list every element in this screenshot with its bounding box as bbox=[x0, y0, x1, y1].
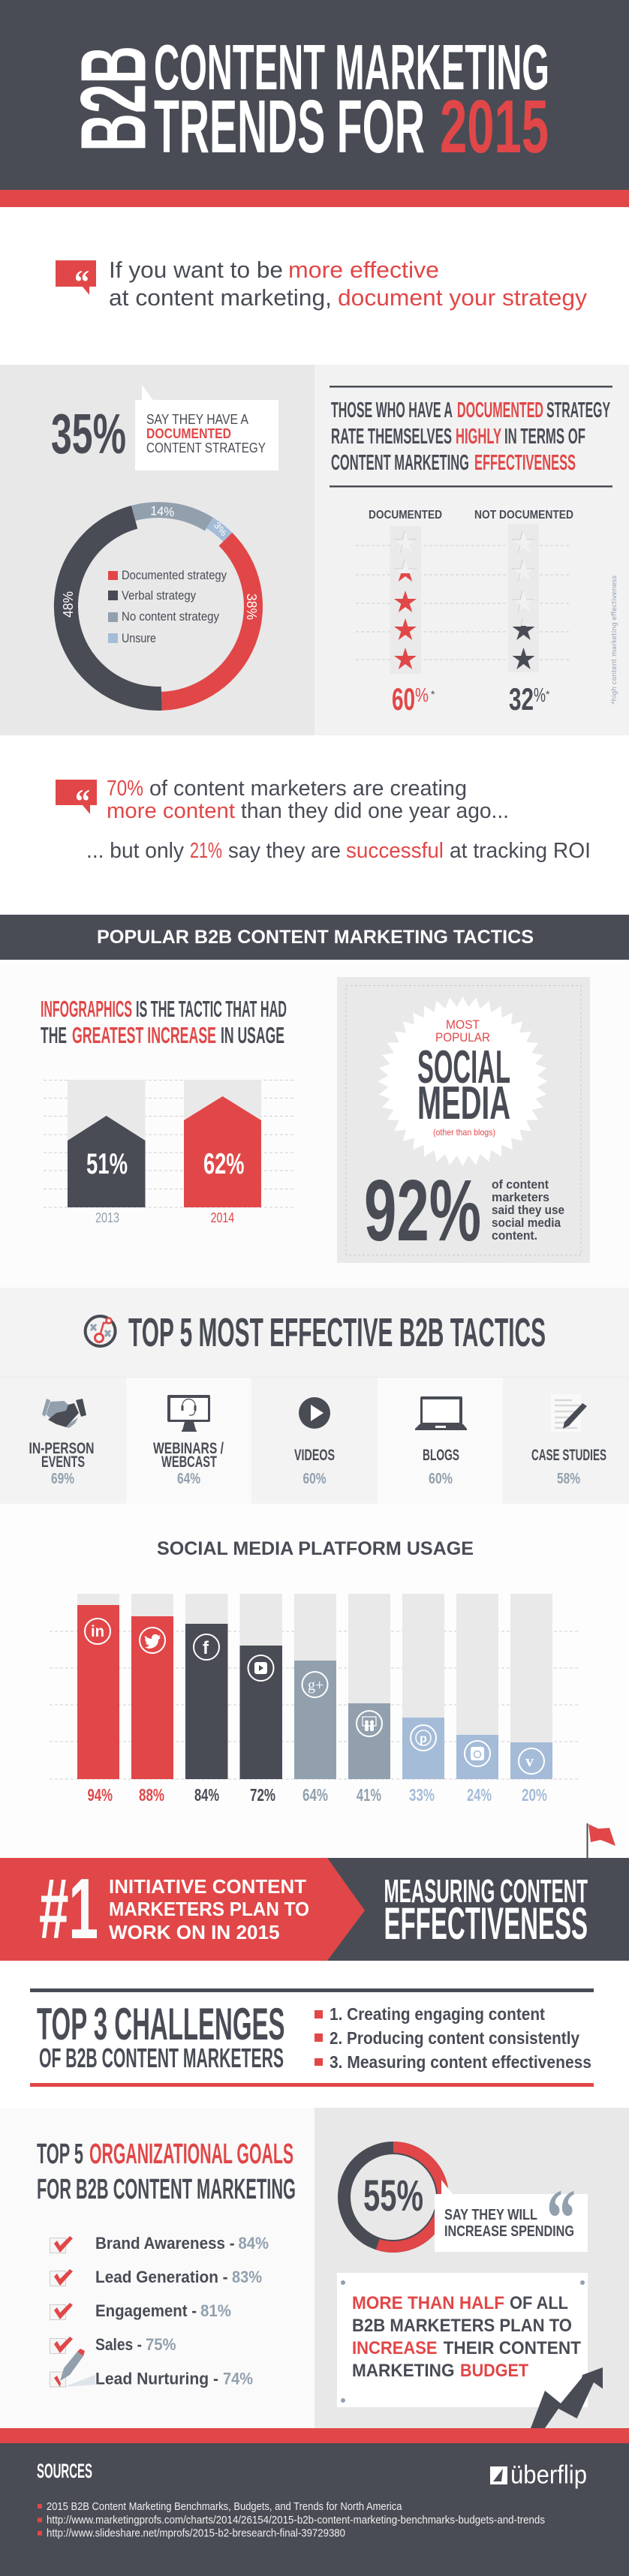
goal: engagement: 81% bbox=[200, 2301, 231, 2320]
icon: flag bbox=[587, 1823, 615, 1858]
bar: youtube bbox=[240, 1594, 282, 1805]
quote: more content: 21% bbox=[190, 839, 222, 863]
bar: linkedin: 94% bbox=[87, 1785, 113, 1805]
stat: 32 percent: 32 bbox=[509, 681, 534, 717]
goal: brand awareness bbox=[50, 2234, 269, 2253]
goal: lead generation: 83% bbox=[232, 2268, 262, 2286]
stat description: marketers bbox=[492, 1190, 549, 1204]
note card: budget: THEIR CONTENT bbox=[444, 2338, 581, 2358]
note card: budget: BUDGET bbox=[460, 2361, 528, 2381]
stat: 60 percent: 60 bbox=[392, 681, 415, 717]
panel: organizational goals bbox=[0, 2108, 314, 2428]
bar: twitter: 88% bbox=[139, 1785, 164, 1805]
callout: documented content strategy: DOCUMENTED bbox=[146, 425, 231, 441]
tactic: webinars: WEBINARS / bbox=[153, 1440, 224, 1457]
stat description: content. bbox=[492, 1228, 537, 1243]
star ratings chart: DOCUMENTED bbox=[369, 509, 442, 522]
icon: handshake bbox=[42, 1399, 86, 1428]
quote: document your strategy: at content marketing, bbox=[109, 284, 332, 311]
heading: TOP 3 CHALLENGES bbox=[37, 1999, 284, 2049]
donut chart: 55 percent: 55% bbox=[363, 2172, 423, 2220]
challenges list: 1. Creating engaging content bbox=[330, 2004, 545, 2024]
donut chart bbox=[54, 502, 263, 711]
heading: infographics: THE bbox=[41, 1022, 67, 1048]
tactic: blogs bbox=[378, 1378, 503, 1504]
title bbox=[63, 32, 549, 169]
panel: spending bbox=[314, 2108, 629, 2428]
panel: social media most popular bbox=[337, 977, 590, 1263]
bar: instagram: 24% bbox=[467, 1785, 492, 1805]
title: 2015 bbox=[440, 85, 549, 169]
header banner bbox=[0, 0, 629, 207]
tactic: videos: VIDEOS bbox=[294, 1447, 335, 1464]
goal: sales bbox=[50, 2335, 176, 2354]
icon: speech bubble bbox=[56, 260, 96, 301]
goal: lead generation bbox=[50, 2268, 262, 2286]
bar: slideshare: 41% bbox=[357, 1785, 381, 1805]
goal: brand awareness: 84% bbox=[239, 2234, 269, 2253]
quote: document your strategy bbox=[56, 257, 587, 311]
section banner: popular tactics bbox=[0, 915, 629, 960]
tactic: webinars: WEBCAST bbox=[161, 1453, 217, 1471]
icon: document and pencil bbox=[551, 1394, 587, 1432]
tactic: webinars bbox=[126, 1378, 251, 1504]
stat description: of content bbox=[492, 1177, 549, 1192]
panel: top 3 challenges bbox=[30, 1988, 594, 2087]
donut chart: 48% bbox=[61, 591, 76, 618]
heading bbox=[331, 398, 610, 475]
challenges list bbox=[314, 2004, 591, 2072]
goal: brand awareness: Brand Awareness - bbox=[95, 2234, 235, 2253]
bar: vimeo bbox=[510, 1594, 552, 1805]
quote: document your strategy: document your strategy bbox=[338, 284, 587, 311]
heading: FOR B2B CONTENT MARKETING bbox=[37, 2174, 296, 2205]
bar: facebook bbox=[185, 1594, 228, 1805]
goal: lead nurturing: Lead Nurturing - bbox=[95, 2370, 218, 2388]
goal: lead generation: Lead Generation - bbox=[95, 2268, 228, 2286]
sources list bbox=[38, 2500, 545, 2539]
footnote: *high content marketing effectiveness bbox=[611, 575, 618, 705]
goal: sales: 75% bbox=[146, 2335, 176, 2354]
bar: pinterest bbox=[402, 1594, 444, 1805]
donut chart: 14% bbox=[150, 503, 175, 519]
icon: playbook bbox=[86, 1316, 116, 1346]
label: number one: #1 bbox=[39, 1862, 98, 1957]
measuring effectiveness text bbox=[384, 1874, 588, 1949]
bar chart: infographics usage: 2013 bbox=[95, 1210, 119, 1225]
starburst badge bbox=[366, 984, 560, 1178]
tactic: videos: 60% bbox=[303, 1471, 327, 1487]
note card: budget: MORE THAN HALF bbox=[352, 2293, 504, 2313]
legend: No content strategy bbox=[122, 610, 220, 624]
sources list: http://www.slideshare.net/mprofs/2015-b2-bresearch-final-39729380 bbox=[47, 2527, 345, 2539]
badge text: MEDIA bbox=[417, 1078, 510, 1129]
donut chart: 55 percent bbox=[344, 2148, 443, 2247]
heading: RATE THEMSELVES bbox=[331, 425, 452, 449]
donut chart: 3% bbox=[212, 520, 230, 539]
panel: top 5 tactics background bbox=[0, 1288, 629, 1504]
heading: OF B2B CONTENT MARKETERS bbox=[39, 2042, 284, 2073]
tactic: videos bbox=[251, 1378, 378, 1504]
panel: tactics background bbox=[0, 960, 629, 1288]
stat: 92 percent: 92% bbox=[364, 1162, 481, 1259]
section banner: popular tactics: POPULAR B2B CONTENT MARKETING TACTICS bbox=[97, 927, 534, 948]
callout: documented content strategy: CONTENT STRATEGY bbox=[146, 440, 266, 455]
bar chart: infographics usage: 2014 bbox=[211, 1210, 234, 1225]
note card: budget: OF ALL bbox=[510, 2293, 568, 2313]
bar chart: infographics usage: 62% bbox=[203, 1148, 245, 1180]
goal: lead nurturing: 74% bbox=[223, 2370, 253, 2388]
bar chart: infographics usage: 51% bbox=[86, 1148, 128, 1180]
quote: more content: 70% bbox=[107, 777, 143, 801]
callout: increase spending: “ bbox=[546, 2172, 576, 2264]
heading: DOCUMENTED bbox=[457, 398, 543, 422]
tactic: case studies: 58% bbox=[557, 1471, 580, 1487]
heading: sources: SOURCES bbox=[37, 2460, 92, 2482]
heading: infographics: IN USAGE bbox=[221, 1022, 284, 1048]
bar: vimeo: v bbox=[525, 1751, 534, 1770]
icon: pencil bbox=[60, 2349, 85, 2381]
icon: speech bubble bbox=[56, 780, 97, 820]
quote: more content: ... but only bbox=[86, 839, 184, 863]
panel: tactics row bbox=[0, 1377, 629, 1504]
heading: SOCIAL MEDIA PLATFORM USAGE bbox=[157, 1538, 474, 1559]
panel: documented strategy share bbox=[0, 365, 314, 735]
icon: play button bbox=[299, 1397, 330, 1429]
heading: infographics: INFOGRAPHICS bbox=[41, 996, 132, 1022]
arrow: upward trend bbox=[531, 2367, 603, 2428]
legend bbox=[108, 569, 227, 645]
icon: speech bubble: “ bbox=[75, 782, 90, 820]
heading: ORGANIZATIONAL GOALS bbox=[89, 2139, 293, 2170]
badge text: POPULAR bbox=[435, 1030, 490, 1045]
callout: increase spending: INCREASE SPENDING bbox=[444, 2223, 574, 2240]
note card: budget: MARKETING bbox=[352, 2361, 455, 2381]
bar: twitter bbox=[131, 1594, 173, 1805]
sources list: http://www.marketingprofs.com/charts/2014/26154/2015-b2b-content-marketing-benchmarks-budgets-and-trends bbox=[47, 2514, 545, 2526]
logo: uberflip: überflip bbox=[510, 2461, 587, 2490]
banner: number one initiative bbox=[0, 1858, 629, 1961]
icon: monitor with headset bbox=[167, 1395, 210, 1432]
tactic: case studies bbox=[503, 1378, 629, 1504]
quote: document your strategy: If you want to be bbox=[109, 257, 283, 283]
bar: vimeo: 20% bbox=[522, 1785, 547, 1805]
goal: engagement bbox=[50, 2301, 231, 2320]
tactic: blogs: BLOGS bbox=[423, 1447, 459, 1464]
stat: 32 percent: * bbox=[546, 688, 550, 700]
bar: google plus bbox=[294, 1594, 336, 1805]
heading: HIGHLY bbox=[456, 425, 501, 449]
callout: increase spending: SAY THEY WILL bbox=[444, 2207, 537, 2223]
quote: more content: at tracking ROI bbox=[450, 839, 591, 863]
heading bbox=[37, 1999, 284, 2073]
stat: 60 percent: * bbox=[431, 688, 435, 700]
donut chart: 38% bbox=[244, 594, 259, 620]
tactic: in-person events: IN-PERSON bbox=[29, 1440, 95, 1457]
icon: speech bubble: “ bbox=[74, 263, 89, 301]
star ratings chart bbox=[356, 509, 573, 674]
tactic: blogs: 60% bbox=[429, 1471, 453, 1487]
quote: more content bbox=[56, 777, 591, 863]
stat description: social media bbox=[492, 1216, 561, 1230]
bar chart: infographics usage bbox=[44, 1080, 294, 1225]
callout: increase spending bbox=[435, 2172, 588, 2264]
stat description bbox=[492, 1177, 564, 1243]
star ratings chart: NOT DOCUMENTED bbox=[474, 509, 573, 522]
heading: infographics: GREATEST INCREASE bbox=[72, 1022, 216, 1048]
quote: document your strategy: more effective bbox=[288, 257, 439, 283]
stat description: said they use bbox=[492, 1203, 564, 1217]
heading: infographics: IS THE TACTIC THAT HAD bbox=[136, 996, 287, 1022]
bar: google plus: 64% bbox=[302, 1785, 328, 1805]
note card: budget: B2B MARKETERS PLAN TO bbox=[352, 2316, 572, 2336]
heading bbox=[37, 2139, 296, 2205]
title: TRENDS FOR bbox=[154, 85, 425, 169]
legend: Verbal strategy bbox=[122, 589, 197, 603]
quote: more content: more content bbox=[107, 799, 235, 823]
challenges list: 2. Producing content consistently bbox=[330, 2028, 579, 2048]
bar: linkedin bbox=[77, 1594, 119, 1805]
tactic: in-person events bbox=[0, 1378, 126, 1504]
bar: youtube: 72% bbox=[250, 1785, 275, 1805]
bar: facebook: 84% bbox=[194, 1785, 219, 1805]
icon: laptop bbox=[415, 1396, 467, 1430]
note card: budget: INCREASE bbox=[352, 2338, 438, 2358]
heading: TOP 5 bbox=[37, 2139, 83, 2170]
initiative text: INITIATIVE CONTENT bbox=[109, 1875, 306, 1898]
legend: Unsure bbox=[122, 632, 156, 645]
initiative text bbox=[109, 1875, 309, 1943]
quote: more content: successful bbox=[346, 839, 444, 863]
badge text: MOST bbox=[446, 1017, 480, 1032]
stat: 60 percent: % bbox=[415, 684, 429, 706]
bar: pinterest: p bbox=[420, 1733, 427, 1745]
tactic: in-person events: EVENTS bbox=[41, 1453, 85, 1471]
tactic: webinars: 64% bbox=[177, 1471, 200, 1487]
panel: effectiveness ratings bbox=[314, 365, 629, 735]
goal: engagement: Engagement - bbox=[95, 2301, 197, 2320]
bar: facebook: f bbox=[203, 1638, 209, 1658]
quote: more content: of content marketers are creating bbox=[149, 777, 467, 801]
badge text: SOCIAL bbox=[417, 1042, 510, 1093]
bar: linkedin: in bbox=[91, 1623, 104, 1640]
goal: lead nurturing bbox=[50, 2370, 253, 2388]
goal: sales: Sales - bbox=[95, 2335, 142, 2354]
callout: documented content strategy: SAY THEY HAVE A bbox=[146, 411, 249, 427]
quote: more content: say they are bbox=[228, 839, 341, 863]
challenges list: 3. Measuring content effectiveness bbox=[330, 2052, 591, 2072]
bar: instagram bbox=[456, 1594, 498, 1805]
initiative text: WORK ON IN 2015 bbox=[109, 1921, 279, 1943]
heading: infographics bbox=[41, 996, 287, 1048]
stat: 32 percent: % bbox=[534, 684, 546, 706]
bar: google plus: g+ bbox=[308, 1677, 324, 1694]
note card: budget bbox=[337, 2273, 588, 2407]
quote: more content: than they did one year ago... bbox=[241, 799, 509, 823]
heading: CONTENT MARKETING bbox=[331, 451, 469, 475]
badge text: (other than blogs) bbox=[433, 1127, 495, 1138]
tactic: in-person events: 69% bbox=[51, 1471, 74, 1487]
bar: slideshare bbox=[348, 1594, 390, 1805]
sources list: 2015 B2B Content Marketing Benchmarks, Budgets, and Trends for North America bbox=[47, 2500, 402, 2513]
legend: Documented strategy bbox=[122, 569, 227, 582]
callout: documented content strategy bbox=[135, 385, 278, 470]
initiative text: MARKETERS PLAN TO bbox=[109, 1898, 309, 1920]
stat: 35 percent: 35% bbox=[51, 402, 126, 465]
bar: pinterest: 33% bbox=[409, 1785, 435, 1805]
heading: THOSE WHO HAVE A bbox=[331, 398, 453, 422]
badge text bbox=[417, 1017, 510, 1138]
footer bbox=[0, 2428, 629, 2576]
panel: social media platform usage bbox=[0, 1504, 629, 1858]
